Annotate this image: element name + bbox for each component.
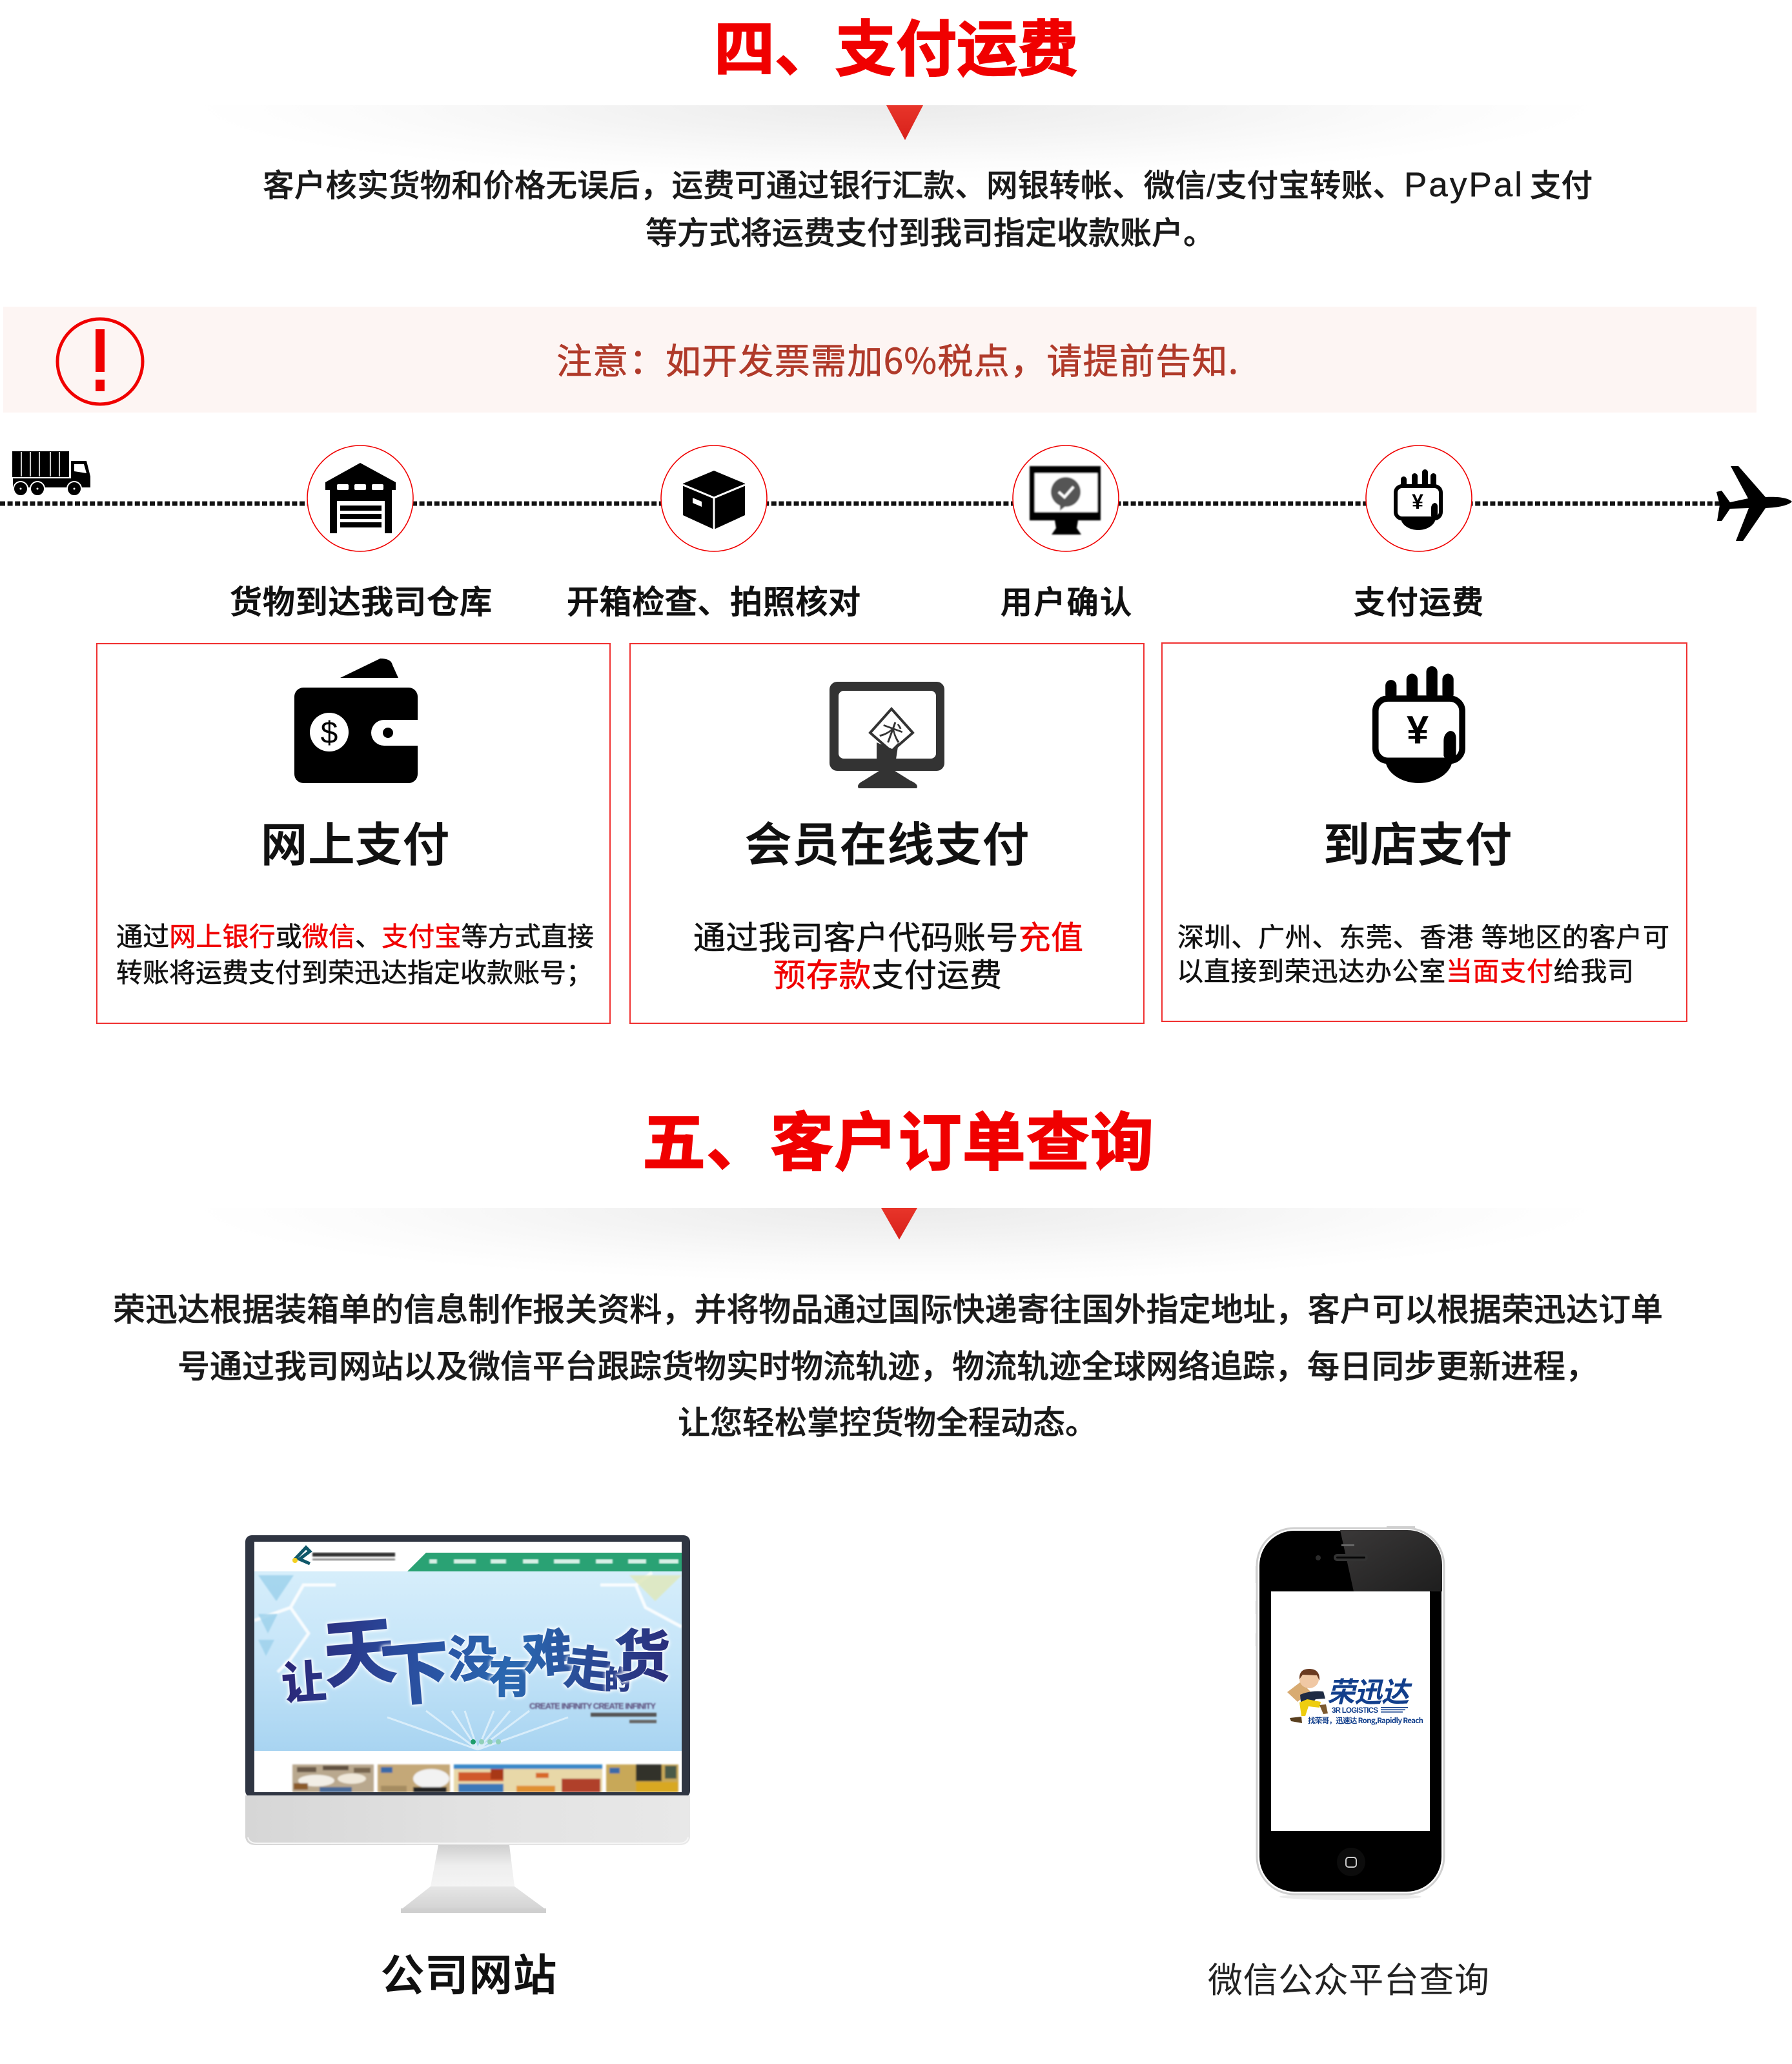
speaker and camera <box>1316 1544 1368 1561</box>
banner slogan: 天 <box>318 1592 400 1702</box>
home button <box>1337 1848 1365 1876</box>
arrow: red down triangle five <box>881 1208 917 1240</box>
card title: 会员在线支付 <box>745 807 1029 875</box>
banner slogan: 的 <box>605 1659 631 1697</box>
notice text: 注意：如开发票需加6%税点，请提前告知. <box>556 332 1238 384</box>
mascot <box>1287 1669 1328 1723</box>
text block: tracking intro: 荣迅达根据装箱单的信息制作报关资料，并将物品通过国际快递寄往国外指定地址，客户可以根据荣迅达订单 <box>113 1292 1663 1328</box>
banner slogan: CREATE INFINITY CREATE INFINITY <box>529 1701 656 1711</box>
step labels: 开箱检查、拍照核对 <box>567 584 860 620</box>
step labels: 用户确认 <box>1001 586 1132 620</box>
text block: tracking intro <box>113 1292 1663 1441</box>
wordmark: 荣迅达 <box>1327 1670 1412 1710</box>
monitor base <box>401 1886 546 1913</box>
website screenshot <box>254 1542 682 1792</box>
arrow: red down triangle four <box>886 105 923 140</box>
step 4: hand payment icon <box>1366 445 1472 551</box>
timeline dotted line <box>0 501 1724 506</box>
text block: payment intro: 等方式将运费支付到我司指定收款账户。 <box>646 216 1215 251</box>
banner slogan: 难 <box>520 1612 575 1687</box>
card text <box>693 920 1083 994</box>
phone screen <box>1271 1591 1430 1831</box>
logo: rongxunda mascot and wordmark <box>1287 1669 1423 1726</box>
icon: hand with yen: ¥ <box>1407 708 1429 752</box>
card text: 预存款支付运费 <box>773 957 1002 994</box>
card text: 通过我司客户代码账号充值 <box>693 920 1083 956</box>
card title: 到店支付 <box>1323 807 1512 875</box>
title: section five: 五、客户订单查询 <box>642 1092 1154 1183</box>
illustration: smartphone <box>1256 1526 1446 1900</box>
logo: rongxunda mascot and wordmark: 找荣哥，迅速达 Rong,Rapidly Reach <box>1308 1715 1423 1726</box>
side buttons <box>1256 1526 1415 1646</box>
step 1: warehouse icon <box>307 445 413 551</box>
text block: payment intro: 支付 <box>1530 169 1593 203</box>
panel: tax notice <box>3 307 1756 413</box>
panel: online payment <box>97 644 610 1023</box>
step labels: 支付运费 <box>1354 586 1483 620</box>
card title: 网上支付 <box>261 807 449 875</box>
banner slogan: 货 <box>615 1611 670 1692</box>
icon: airplane <box>1716 466 1792 541</box>
monitor chin <box>245 1795 690 1845</box>
header gradient strip four <box>194 105 1598 254</box>
card text: 深圳、广州、东莞、香港 等地区的客户可 <box>1177 923 1669 952</box>
step labels <box>230 584 1483 620</box>
text block: tracking intro: 号通过我司网站以及微信平台跟踪货物实时物流轨迹，物流轨迹全球网络追踪，每日同步更新进程， <box>178 1349 1598 1385</box>
title: section four: 四、支付运费 <box>714 1 1078 88</box>
card text: 以直接到荣迅达办公室当面支付给我司 <box>1177 957 1634 986</box>
banner slogan: 走 <box>562 1629 615 1701</box>
icon: wallet: $ <box>321 716 338 750</box>
logo: rongxunda mascot and wordmark: 3R LOGISTICS <box>1332 1707 1378 1715</box>
step 4: hand payment icon: ¥ <box>1412 490 1423 513</box>
banner slogan: 有 <box>489 1644 532 1706</box>
step 2: box icon <box>661 445 767 551</box>
banner slogan: 下 <box>377 1615 454 1721</box>
step labels: 货物到达我司仓库 <box>230 584 492 620</box>
banner slogan: 让 <box>280 1646 328 1712</box>
monitor stand <box>431 1845 514 1886</box>
thumbnails <box>292 1764 678 1792</box>
text block: payment intro <box>263 166 1593 251</box>
text block: tracking intro: 让您轻松掌控货物全程动态。 <box>678 1405 1097 1441</box>
icon: hand with yen <box>1376 666 1462 783</box>
icon: truck <box>12 451 90 496</box>
monitor bezel <box>245 1535 690 1797</box>
label: company website: 公司网站 <box>381 1941 556 2003</box>
banner slogan: 没 <box>448 1620 497 1691</box>
banner slogan <box>280 1617 671 1724</box>
card text: 转账将运费支付到荣迅达指定收款账号； <box>116 958 593 988</box>
card text: 通过网上银行或微信、支付宝等方式直接 <box>116 922 594 952</box>
text block: payment intro: 客户核实货物和价格无误后，运费可通过银行汇款、网银转帐、微信/支付宝转账、 <box>263 169 1404 203</box>
card text <box>1177 923 1669 986</box>
icon: monitor with diamond: 术 <box>875 712 908 751</box>
panel: member online payment <box>630 644 1144 1023</box>
step 3: monitor check icon <box>1013 445 1119 551</box>
label: wechat platform: 微信公众平台查询 <box>1208 1952 1489 2003</box>
icon: exclamation circle <box>57 319 143 404</box>
illustration: desktop monitor <box>245 1535 690 1913</box>
icon: wallet <box>294 659 418 783</box>
panel: in-store payment <box>1162 643 1687 1021</box>
card text <box>116 922 594 988</box>
icon: monitor with diamond <box>830 682 944 788</box>
header gradient strip five <box>194 1208 1598 1356</box>
text block: payment intro: PayPal <box>1404 166 1522 204</box>
